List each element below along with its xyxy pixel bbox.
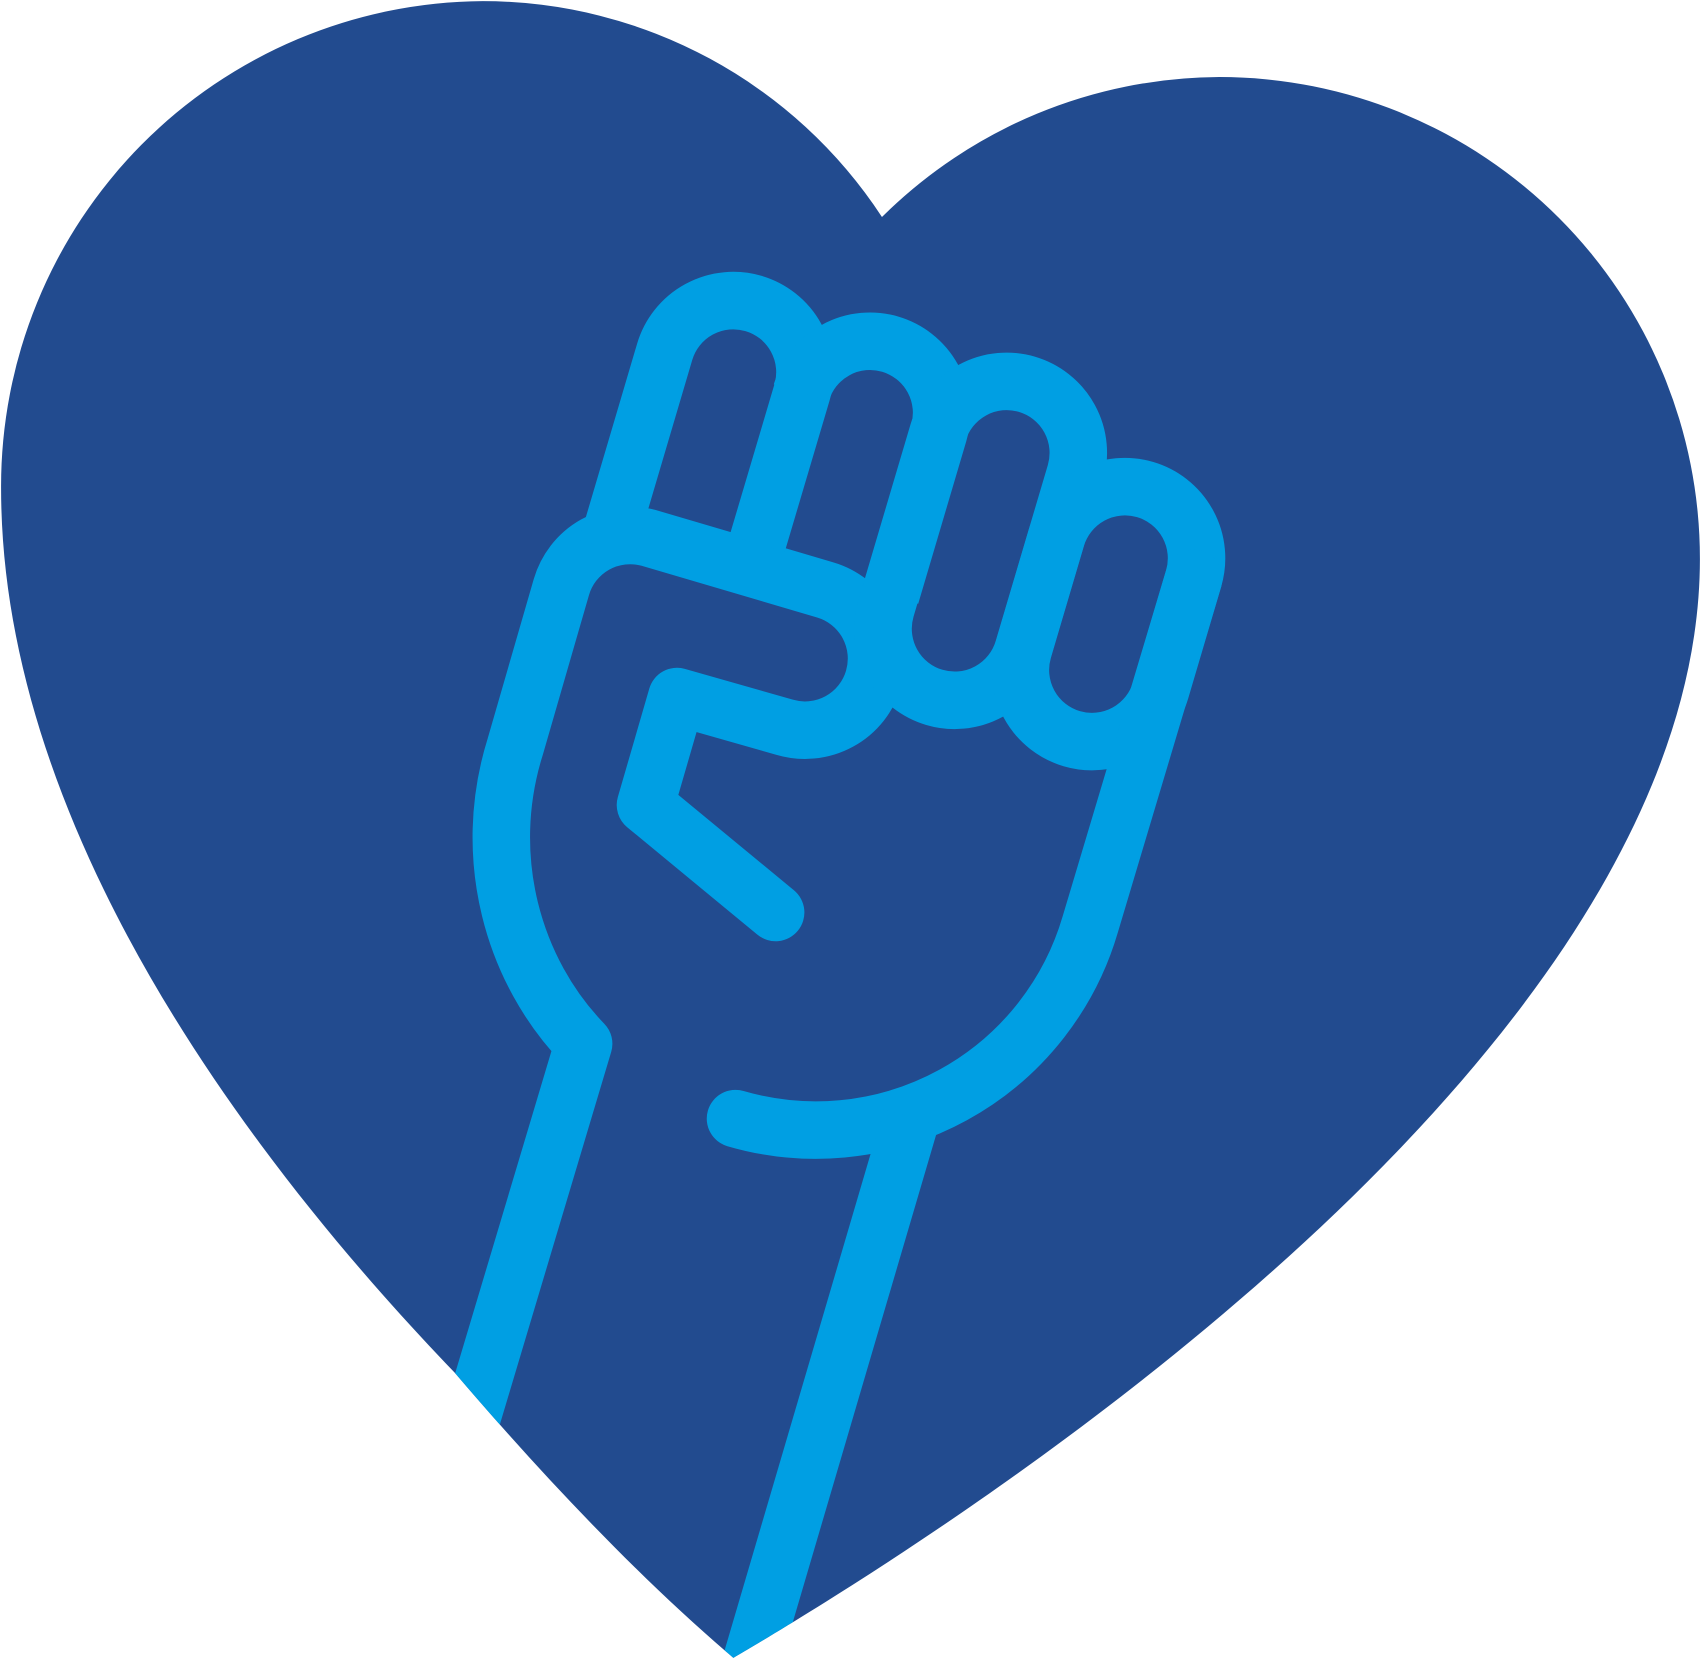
right arm line	[749, 1118, 911, 1660]
icon: raised fist	[468, 301, 1197, 1660]
ring finger capsule	[883, 381, 1078, 700]
little finger capsule	[1020, 487, 1197, 742]
thumb and left arm outline	[468, 535, 877, 1432]
index finger	[607, 301, 805, 548]
right wrist and palm curve	[736, 579, 1194, 1130]
middle finger	[801, 341, 942, 596]
